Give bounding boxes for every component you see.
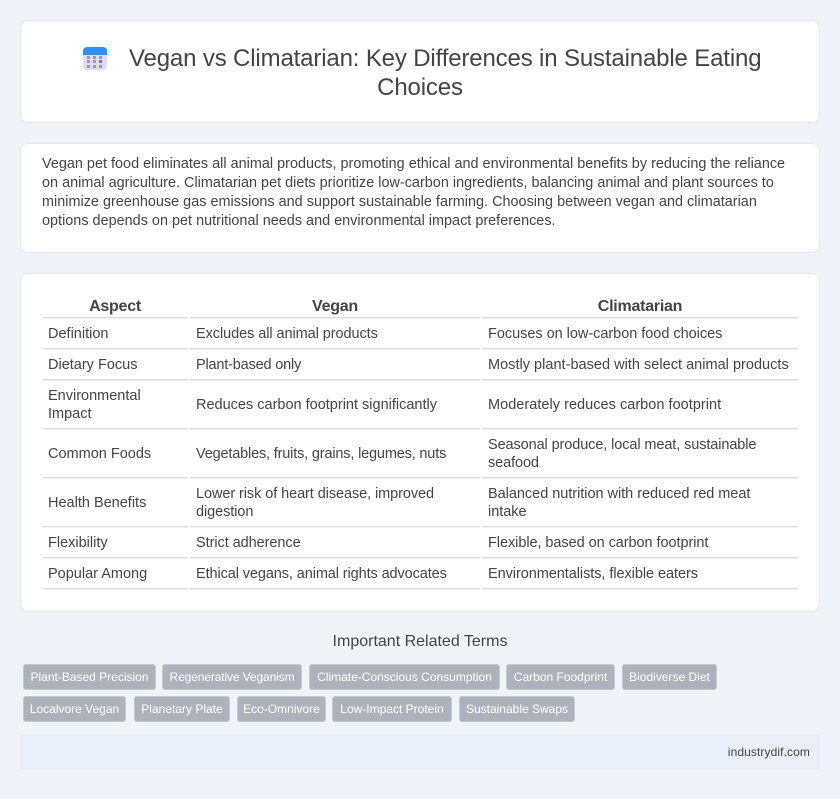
row: Flexibility: Flexible, based on carbon footprint (488, 535, 708, 551)
tag: Eco-Omnivore (243, 702, 320, 716)
tag (134, 696, 230, 722)
title (129, 45, 761, 101)
table header: Aspect (89, 298, 141, 315)
row: Common Foods: Seasonal produce, local meat, sustainable (488, 437, 756, 453)
row: Environmental Impact: Environmental (48, 388, 141, 404)
tag (309, 664, 500, 690)
row: Common Foods: Common Foods (48, 446, 151, 462)
row: Popular Among: Environmentalists, flexible eaters (488, 566, 698, 582)
tag (23, 664, 156, 690)
row: Popular Among (48, 566, 698, 582)
text block: introduction (42, 156, 785, 229)
tag (332, 696, 452, 722)
row: Health Benefits: digestion (196, 504, 253, 520)
row: Environmental Impact: Moderately reduces carbon footprint (488, 397, 721, 413)
table header (89, 298, 682, 315)
tag: Low-Impact Protein (340, 702, 444, 716)
row: Health Benefits: Balanced nutrition with reduced red meat (488, 486, 750, 502)
row: Definition: Focuses on low-carbon food choices (488, 326, 722, 342)
table header: Vegan (312, 298, 358, 315)
panel: comparison table (20, 273, 820, 612)
tag (237, 696, 326, 722)
panel: introduction (20, 143, 820, 253)
icon: calendar (83, 47, 107, 70)
text block: introduction: minimize greenhouse gas emissions and support sustainable farming. Choosing between vegan and climatarian (42, 194, 757, 210)
row: Dietary Focus: Mostly plant-based with select animal products (488, 357, 789, 373)
row: Environmental Impact: Impact (48, 406, 92, 422)
tag: Planetary Plate (141, 702, 223, 716)
tag: Carbon Foodprint (514, 670, 607, 684)
row: Flexibility: Strict adherence (196, 535, 301, 551)
tag (622, 664, 717, 690)
row: Popular Among: Ethical vegans, animal rights advocates (196, 566, 447, 582)
text block: introduction: options depends on pet nutritional needs and environmental impact preferences. (42, 213, 556, 229)
row: Common Foods: Vegetables, fruits, grains, legumes, nuts (196, 446, 446, 462)
row: Definition: Definition (48, 326, 108, 342)
row: Flexibility: Flexibility (48, 535, 108, 551)
table header: Climatarian (598, 298, 682, 315)
row: Environmental Impact (48, 388, 722, 422)
heading: related terms: Important Related Terms (333, 633, 507, 650)
row: Definition (48, 326, 722, 342)
tags: related terms (23, 664, 717, 722)
row: Common Foods (48, 437, 756, 471)
row: Health Benefits: Health Benefits (48, 495, 146, 511)
tag: Regenerative Veganism (170, 670, 294, 684)
row: Health Benefits: Lower risk of heart disease, improved (196, 486, 434, 502)
tag (459, 696, 575, 722)
title: Vegan vs Climatarian: Key Differences in Sustainable Eating (129, 45, 761, 72)
tag: Climate-Conscious Consumption (317, 670, 492, 684)
tag: Sustainable Swaps (466, 702, 568, 716)
tag: Localvore Vegan (30, 702, 119, 716)
row: Health Benefits: intake (488, 504, 527, 520)
text block: introduction: on animal agriculture. Climatarian pet diets prioritize low-carbon ingredients, balancing animal and plant sources to (42, 175, 774, 191)
row: Dietary Focus (48, 357, 789, 373)
tag (23, 696, 126, 722)
panel: title card (20, 20, 820, 123)
footer bar (20, 735, 820, 769)
row: Dietary Focus: Dietary Focus (48, 357, 137, 373)
row: Definition: Excludes all animal products (196, 326, 378, 342)
footer source: industrydif.com (728, 745, 810, 759)
row: Environmental Impact: Reduces carbon footprint significantly (196, 397, 437, 413)
tag: Biodiverse Diet (629, 670, 710, 684)
row: Flexibility (48, 535, 708, 551)
tag (506, 664, 615, 690)
text block: introduction: Vegan pet food eliminates all animal products, promoting ethical and environmental benefits by reducing the reliance (42, 156, 785, 172)
row: Health Benefits (48, 486, 750, 520)
tag: Plant-Based Precision (30, 670, 149, 684)
row: Dietary Focus: Plant-based only (196, 357, 301, 373)
tag (162, 664, 302, 690)
title: Choices (377, 74, 463, 101)
row: Common Foods: seafood (488, 455, 539, 471)
row: Popular Among: Popular Among (48, 566, 147, 582)
